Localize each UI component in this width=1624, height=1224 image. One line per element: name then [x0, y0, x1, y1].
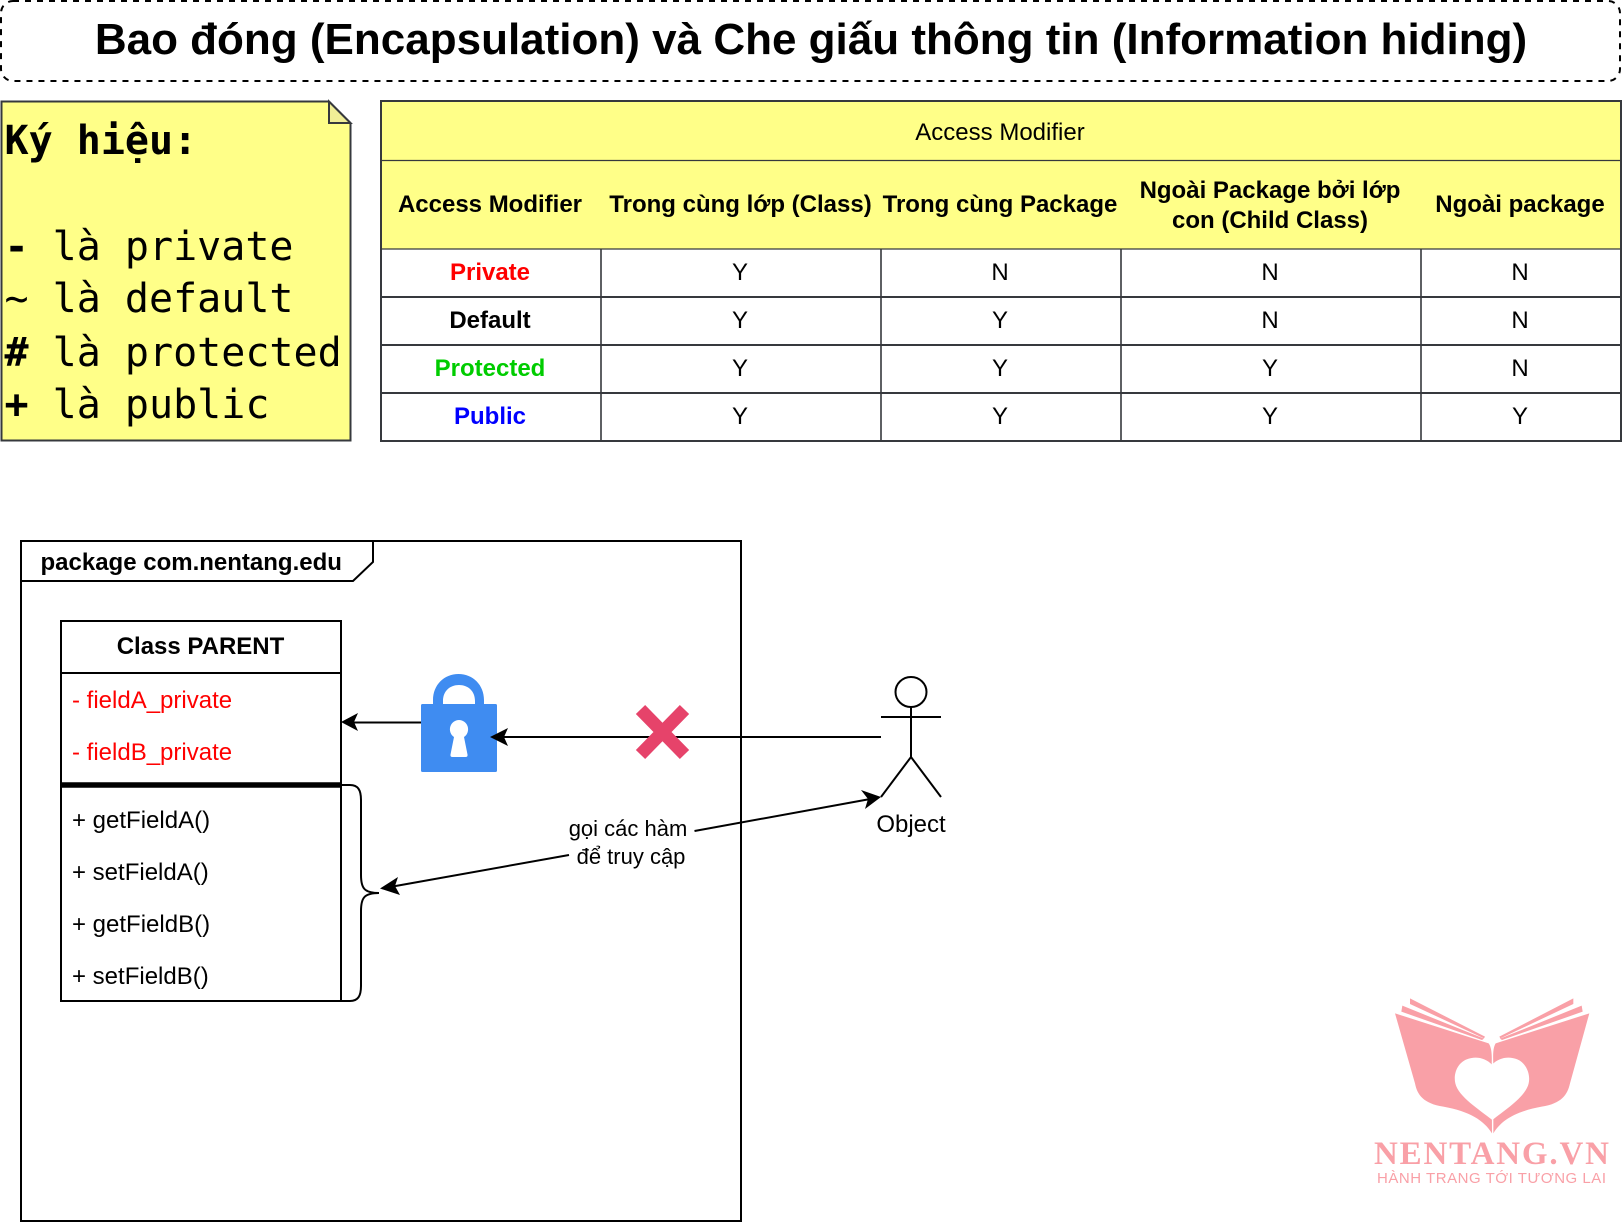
private fields: - fieldB_private: [72, 739, 232, 766]
logo: nentang.vn: [1374, 998, 1609, 1187]
table header row: con (Child Class): [1172, 207, 1368, 234]
package label: package com.nentang.edu: [40, 549, 342, 576]
row: private: N: [1511, 259, 1529, 286]
row: public: Y: [1262, 403, 1278, 430]
row: private: N: [1261, 259, 1279, 286]
arrow label: gọi các hàm: [569, 816, 687, 841]
legend lines: [4, 224, 342, 428]
logo tagline: HÀNH TRANG TỚI TƯƠNG LAI: [1377, 1170, 1606, 1187]
arrow: object blocked at lock: [490, 728, 881, 746]
panel: access modifier table: [381, 101, 1621, 441]
row: protected: N: [1511, 355, 1529, 382]
row: protected: [435, 355, 1529, 382]
row: protected: Y: [732, 355, 748, 382]
row: private: [450, 259, 1529, 286]
arrow: lock to class fields: [341, 713, 421, 731]
row: public: Y: [1512, 403, 1528, 430]
panel: package frame: [21, 541, 741, 1221]
row: default: N: [1511, 307, 1529, 334]
row: private: N: [991, 259, 1009, 286]
title: [1, 1, 1620, 81]
table header row: Access Modifier: [398, 191, 582, 218]
table title: Access Modifier: [915, 119, 1085, 146]
panel: legend note: [2, 102, 350, 440]
icon: red cross: [640, 710, 684, 754]
private fields: - fieldA_private: [72, 687, 232, 714]
arrow: call functions to object: [694, 790, 881, 831]
table header row: Trong cùng lớp (Class): [609, 191, 872, 218]
table header row: [398, 177, 1605, 234]
arrow: call functions to methods: [380, 855, 569, 895]
icon: open book with heart: [1395, 998, 1589, 1133]
brace around methods: [341, 785, 379, 1001]
row: default: Y: [732, 307, 748, 334]
row: protected: Protected: [435, 355, 545, 382]
public methods: + getFieldA(): [72, 807, 210, 834]
arrow label: [569, 816, 687, 869]
table header row: Ngoài package: [1435, 191, 1605, 218]
row: protected: Y: [992, 355, 1008, 382]
public methods: + setFieldA(): [72, 859, 209, 886]
row: public: [454, 403, 1528, 430]
row: public: Y: [732, 403, 748, 430]
row: public: Public: [454, 403, 526, 430]
class name: Class PARENT: [117, 633, 285, 660]
row: default: N: [1261, 307, 1279, 334]
legend lines: + là public: [4, 382, 269, 428]
public methods: + setFieldB(): [72, 963, 209, 990]
actor: object: [876, 677, 946, 838]
logo wordmark: NENTANG.VN: [1374, 1136, 1609, 1172]
table header row: Ngoài Package bởi lớp: [1140, 177, 1400, 204]
row: default: Y: [992, 307, 1008, 334]
row: default: Default: [449, 307, 531, 334]
legend heading: Ký hiệu:: [4, 118, 197, 164]
legend lines: ~ là default: [4, 276, 293, 322]
row: private: Private: [450, 259, 530, 286]
private fields: [72, 687, 232, 766]
arrow label: để truy cập: [577, 844, 685, 869]
row: private: Y: [732, 259, 748, 286]
legend lines: # là protected: [4, 330, 342, 376]
icon: lock: [421, 674, 497, 772]
table header row: Trong cùng Package: [883, 191, 1117, 218]
actor label: Object: [876, 811, 946, 838]
legend lines: - là private: [4, 224, 294, 270]
title: Bao đóng (Encapsulation) và Che giấu thông tin (Information hiding): [95, 15, 1527, 64]
row: protected: Y: [1262, 355, 1278, 382]
public methods: [72, 807, 210, 990]
class box: PARENT: [61, 621, 341, 1001]
row: default: [449, 307, 1529, 334]
public methods: + getFieldB(): [72, 911, 210, 938]
row: public: Y: [992, 403, 1008, 430]
